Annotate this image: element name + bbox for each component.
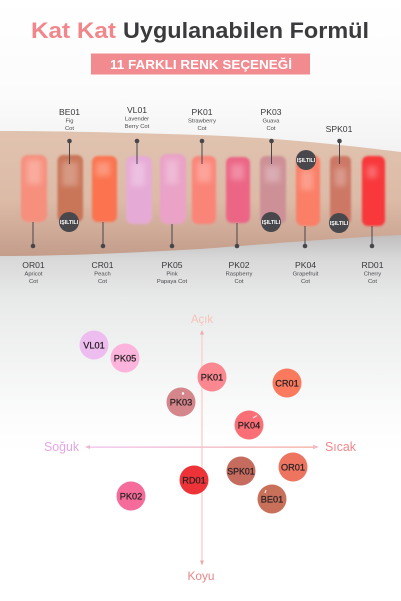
- label: SPK01: SPK01: [326, 124, 353, 134]
- colour dot: PK01: [198, 362, 226, 392]
- colour dot: CR01: CR01: [275, 378, 299, 388]
- colour dot: VL01: [80, 330, 108, 360]
- label: PK03: Cot: [266, 126, 276, 132]
- colour dot: CR01: [272, 368, 302, 398]
- label: BE01: BE01: [59, 107, 80, 117]
- axis label: Sıcak: Sıcak: [325, 440, 357, 454]
- label: PK02: PK02: [228, 260, 250, 270]
- label: PK04: Grapefruit: [293, 272, 319, 278]
- shimmer badge: BE01: IŞILTILI: [60, 220, 79, 226]
- colour dot: PK01: PK01: [201, 372, 223, 382]
- label: RD01: RD01: [362, 260, 384, 270]
- label: VL01: Berry Cot: [125, 124, 150, 130]
- label: PK02: [226, 260, 252, 285]
- label: PK03: [260, 107, 282, 132]
- colour dot: PK05: [110, 344, 140, 372]
- label: OR01: Apricot: [24, 272, 43, 278]
- horizontal axis: cool to warm: [85, 445, 319, 449]
- label: PK02: Raspberry: [226, 272, 252, 278]
- colour dot: BE01: [258, 484, 286, 514]
- arm photo: [0, 131, 401, 256]
- subtitle banner: [91, 54, 310, 74]
- axis label: Koyu: Koyu: [188, 569, 214, 583]
- label: CR01: CR01: [92, 260, 114, 270]
- label: PK05: Papaya Cot: [157, 279, 188, 285]
- label: RD01: Cherry: [364, 272, 381, 278]
- colour dot: PK05: PK05: [114, 354, 136, 364]
- colour dot: PK04: PK04: [238, 420, 260, 430]
- label: CR01: [92, 260, 114, 285]
- shimmer badge: BE01: [59, 212, 79, 232]
- lip colour swatches on arm: [21, 154, 385, 226]
- vertical axis: light to dark: [200, 330, 204, 566]
- shimmer badge: SPK01: [329, 213, 349, 233]
- colour dot: PK03: [166, 388, 196, 416]
- colour dot: VL01: VL01: [83, 340, 105, 350]
- label: PK01: PK01: [191, 107, 213, 117]
- colour dot: PK04: [234, 410, 264, 440]
- title: Uygulanabilen Formül: [123, 18, 369, 43]
- label: BE01: [59, 107, 80, 132]
- swatch gloss highlights: [27, 160, 377, 190]
- title: [31, 18, 369, 43]
- label: PK04: PK04: [295, 260, 316, 270]
- shimmer badge: PK04: IŞILTILI: [297, 158, 316, 164]
- label: VL01: VL01: [127, 105, 147, 115]
- colour dot: SPK01: [226, 456, 256, 486]
- leader lines: [31, 139, 374, 248]
- title: Kat Kat: [31, 18, 117, 43]
- colour dot: PK02: [116, 482, 146, 510]
- label: OR01: Cot: [29, 279, 38, 285]
- axis label: Soğuk: Soğuk: [44, 440, 80, 454]
- label: RD01: Cot: [368, 279, 377, 285]
- label: OR01: [22, 260, 45, 285]
- colour dot: OR01: [278, 452, 308, 482]
- label: PK02: Cot: [234, 279, 244, 285]
- colour dot: OR01: OR01: [281, 462, 305, 472]
- label: CR01: Cot: [98, 279, 107, 285]
- label: PK04: Cot: [301, 279, 310, 285]
- label: VL01: [125, 105, 150, 130]
- label: PK05: [157, 260, 188, 285]
- label: PK03: Guava: [262, 118, 280, 124]
- subtitle banner: 11 FARKLI RENK SEÇENEĞİ: [110, 57, 292, 72]
- label: OR01: OR01: [22, 260, 45, 270]
- colour dot: PK02: PK02: [120, 492, 142, 502]
- label: RD01: [362, 260, 384, 285]
- label: PK05: PK05: [161, 260, 183, 270]
- shimmer badge: PK04: [296, 150, 316, 170]
- colour dot: BE01: BE01: [261, 494, 283, 504]
- label: PK03: PK03: [260, 107, 282, 117]
- label: BE01: Cot: [65, 126, 74, 132]
- shimmer badge: PK03: [261, 212, 281, 232]
- label: VL01: Lavender: [125, 116, 149, 122]
- colour dot: SPK01: SPK01: [227, 466, 255, 476]
- colour dot: RD01: [180, 466, 208, 494]
- colour dot: RD01: RD01: [182, 476, 206, 486]
- label: PK01: Cot: [197, 126, 207, 132]
- label: PK01: Strawberry: [188, 118, 216, 124]
- shimmer badge: SPK01: IŞILTILI: [330, 221, 349, 227]
- label: CR01: Peach: [94, 272, 111, 278]
- label: PK05: Pink: [166, 272, 178, 278]
- colour dot: PK03: PK03: [170, 398, 192, 408]
- label: PK04: [293, 260, 319, 285]
- label: BE01: Fig: [65, 118, 74, 124]
- shimmer badge: PK03: IŞILTILI: [262, 220, 281, 226]
- axis label: Açık: Açık: [191, 312, 214, 326]
- label: PK01: [188, 107, 216, 132]
